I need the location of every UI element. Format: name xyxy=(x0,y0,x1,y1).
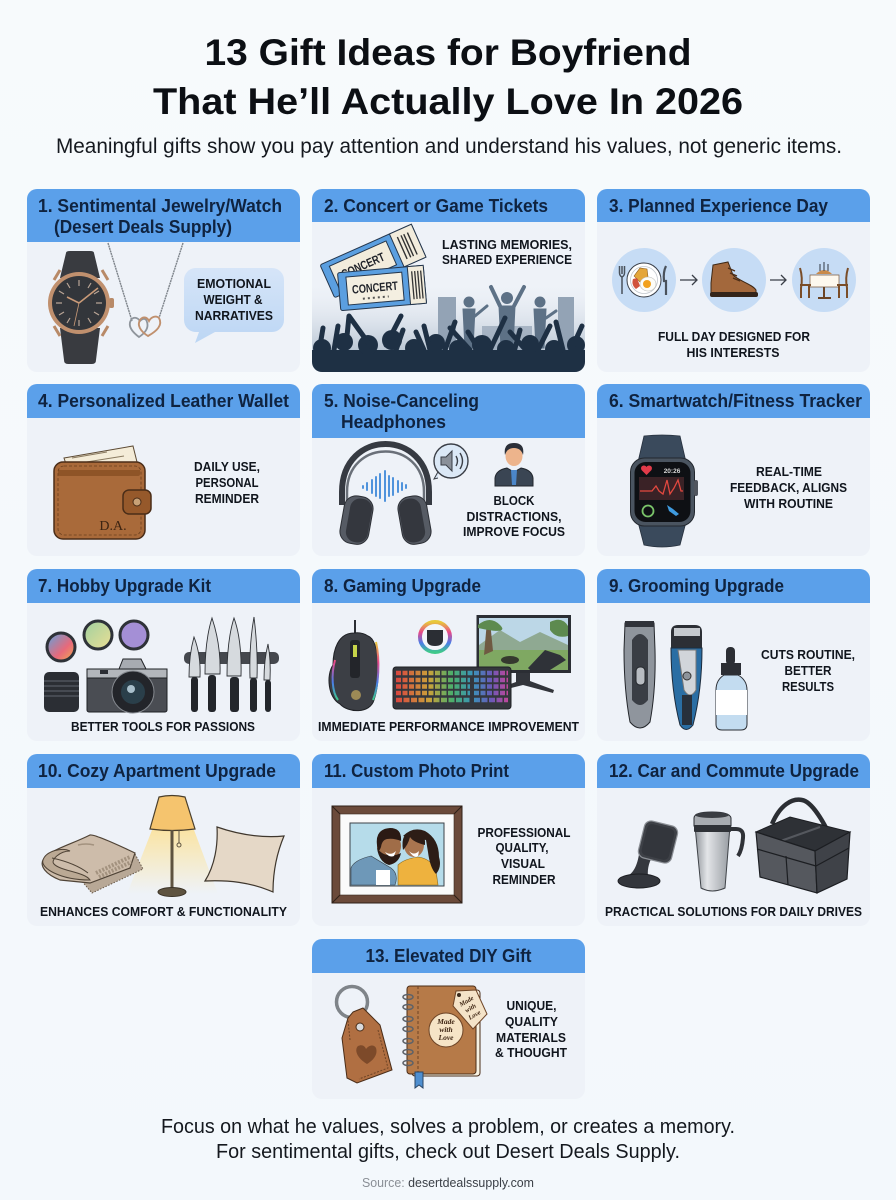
icon: serum bottle xyxy=(716,647,747,730)
arrow xyxy=(770,275,786,285)
icon: gaming mouse xyxy=(329,620,378,711)
heading 1: 1. Sentimental Jewelry/Watch xyxy=(38,196,282,216)
icon: concert tickets: CONCERT xyxy=(339,250,387,281)
icon: spiral notebook xyxy=(403,986,487,1088)
icon: phone mount xyxy=(618,819,679,888)
label 13 xyxy=(495,998,567,1060)
label 3 xyxy=(658,329,811,360)
icon: car organizer bag xyxy=(756,800,850,893)
label 6: REAL-TIME xyxy=(756,464,822,479)
footer text xyxy=(161,1116,735,1163)
label 5: BLOCK xyxy=(494,493,535,508)
heading 11: 11. Custom Photo Print xyxy=(324,761,509,781)
label 11: QUALITY, xyxy=(496,840,548,855)
callout: emotional weight: NARRATIVES xyxy=(195,308,273,323)
arrow xyxy=(680,275,697,285)
icon: camera and lens xyxy=(44,659,167,713)
subtitle: Meaningful gifts show you pay attention and understand his values, not generic items. xyxy=(56,135,842,158)
heading 6: 6. Smartwatch/Fitness Tracker xyxy=(609,391,862,411)
title: That He’ll Actually Love In 2026 xyxy=(153,81,743,122)
icon: spiral notebook: Made xyxy=(436,1017,455,1026)
heading 2: 2. Concert or Game Tickets xyxy=(324,196,548,216)
label 6: WITH ROUTINE xyxy=(744,496,833,511)
icon: smartwatch xyxy=(630,435,698,547)
icon: leather wallet xyxy=(54,446,151,539)
label 2: SHARED EXPERIENCE xyxy=(442,252,572,267)
icon: hiking boot xyxy=(702,248,766,312)
icon: knife rack xyxy=(184,617,279,712)
label 4: REMINDER xyxy=(195,491,260,506)
label 2 xyxy=(442,237,572,267)
heading 7: 7. Hobby Upgrade Kit xyxy=(38,576,211,596)
icon: travel mug xyxy=(694,812,743,891)
panel: 7 hobby upgrade kit xyxy=(27,569,300,741)
panel: 5 noise-canceling headphones xyxy=(312,384,585,556)
heading 13: 13. Elevated DIY Gift xyxy=(366,946,532,966)
heading 5 xyxy=(312,384,585,438)
heading 7 xyxy=(27,569,300,603)
panel: 10 cozy apartment upgrade xyxy=(27,754,300,926)
heading 4: 4. Personalized Leather Wallet xyxy=(38,391,289,411)
label 11: PROFESSIONAL xyxy=(478,825,571,840)
label 5: IMPROVE FOCUS xyxy=(463,524,565,539)
icon: concert tickets xyxy=(320,224,426,311)
label 4: DAILY USE, xyxy=(194,459,260,474)
label 13: QUALITY xyxy=(505,1014,558,1029)
label 3: HIS INTERESTS xyxy=(686,345,780,360)
label 11 xyxy=(478,825,571,887)
label 4 xyxy=(194,459,260,506)
heading 9 xyxy=(597,569,870,603)
heading 13 xyxy=(312,939,585,973)
label 13: & THOUGHT xyxy=(495,1045,567,1060)
icon: electric shaver xyxy=(671,625,702,730)
icon: breakfast plate xyxy=(612,248,676,312)
heading 1: (Desert Deals Supply) xyxy=(54,217,232,237)
icon: headphones xyxy=(338,444,433,546)
heading 12 xyxy=(597,754,870,788)
panel: 6 smartwatch/fitness tracker xyxy=(597,384,870,556)
label 13: MATERIALS xyxy=(496,1030,566,1045)
heading 3: 3. Planned Experience Day xyxy=(609,196,828,216)
icon: spiral notebook: Made xyxy=(458,995,475,1009)
footer text: Focus on what he values, solves a problem, or creates a memory. xyxy=(161,1116,735,1138)
icon: smartwatch: 20:26 xyxy=(664,468,681,475)
footer text: For sentimental gifts, check out Desert Deals Supply. xyxy=(216,1141,680,1163)
title: 13 Gift Ideas for Boyfriend xyxy=(204,32,692,73)
label 9: CUTS ROUTINE, xyxy=(761,647,855,662)
icon: camera filters xyxy=(47,621,148,661)
callout: emotional weight: EMOTIONAL xyxy=(197,276,271,291)
heading 10 xyxy=(27,754,300,788)
panel: 11 custom photo print xyxy=(312,754,585,926)
label 9: BETTER xyxy=(784,663,832,678)
label 8: IMMEDIATE PERFORMANCE IMPROVEMENT xyxy=(318,719,579,734)
label 6 xyxy=(730,464,847,511)
label 11: REMINDER xyxy=(492,872,556,887)
panel: 2 concert or game tickets xyxy=(312,189,585,372)
panel: 12 car and commute upgrade xyxy=(597,754,870,926)
label 2: LASTING MEMORIES, xyxy=(442,237,572,252)
heading 1 xyxy=(27,189,300,242)
heading 4 xyxy=(27,384,300,418)
label 10: ENHANCES COMFORT & FUNCTIONALITY xyxy=(40,904,287,919)
icon: spiral notebook: Love xyxy=(467,1009,482,1022)
heading 5: Headphones xyxy=(341,412,446,432)
heading 9: 9. Grooming Upgrade xyxy=(609,576,784,596)
heading 2 xyxy=(312,189,585,222)
label 3: FULL DAY DESIGNED FOR xyxy=(658,329,811,344)
panel: 3 planned experience day xyxy=(597,189,870,372)
heading 11 xyxy=(312,754,585,788)
label 11: VISUAL xyxy=(501,856,545,871)
heading 3 xyxy=(597,189,870,222)
heading 12: 12. Car and Commute Upgrade xyxy=(609,761,859,781)
label 6: FEEDBACK, ALIGNS xyxy=(730,480,847,495)
icon: monitor xyxy=(476,615,571,693)
heading 10: 10. Cozy Apartment Upgrade xyxy=(38,761,276,781)
heading 6 xyxy=(597,384,870,418)
icon: focused person xyxy=(495,443,533,486)
icon: spiral notebook: with xyxy=(439,1025,453,1034)
label 5: DISTRACTIONS, xyxy=(466,509,562,524)
source line: Source: desertdealssupply.com xyxy=(362,1176,534,1190)
icon: pillow xyxy=(205,827,284,892)
icon: spiral notebook: Love xyxy=(438,1033,454,1042)
label 4: PERSONAL xyxy=(196,475,259,490)
callout: emotional weight: WEIGHT & xyxy=(204,292,262,307)
icon: heart necklace xyxy=(108,243,183,337)
label 13: UNIQUE, xyxy=(506,998,556,1013)
panel: 9 grooming upgrade xyxy=(597,569,870,741)
panel: 13 elevated diy gift xyxy=(312,939,585,1099)
callout: emotional weight xyxy=(184,268,284,343)
icon: throw blanket xyxy=(42,835,143,893)
icon: rgb headset ring xyxy=(420,622,450,652)
icon: leather keychain xyxy=(336,986,392,1083)
icon: beard trimmer xyxy=(624,621,655,728)
label 9 xyxy=(761,647,855,694)
panel: 4 personalized leather wallet xyxy=(27,384,300,556)
icon: floor lamp xyxy=(127,796,218,896)
icon: dinner table xyxy=(792,248,856,312)
label 5 xyxy=(463,493,565,539)
panel: 8 gaming upgrade xyxy=(312,569,585,741)
label 7: BETTER TOOLS FOR PASSIONS xyxy=(71,719,255,734)
heading 8: 8. Gaming Upgrade xyxy=(324,576,481,596)
icon: spiral notebook: with xyxy=(464,1002,478,1014)
icon: concert tickets: CONCERT xyxy=(351,279,399,297)
icon: watch xyxy=(48,251,114,364)
icon: framed photo xyxy=(332,806,462,903)
icon: leather wallet: D.A. xyxy=(99,519,127,534)
label 9: RESULTS xyxy=(782,679,834,694)
concert crowd scene xyxy=(312,280,585,372)
icon: rgb keyboard xyxy=(393,667,511,709)
heading 8 xyxy=(312,569,585,603)
icon: speaker bubble xyxy=(434,444,468,479)
title xyxy=(153,32,743,122)
panel: 1 sentimental jewelry/watch xyxy=(27,189,300,372)
label 12: PRACTICAL SOLUTIONS FOR DAILY DRIVES xyxy=(605,904,862,919)
heading 5: 5. Noise-Canceling xyxy=(324,391,479,411)
